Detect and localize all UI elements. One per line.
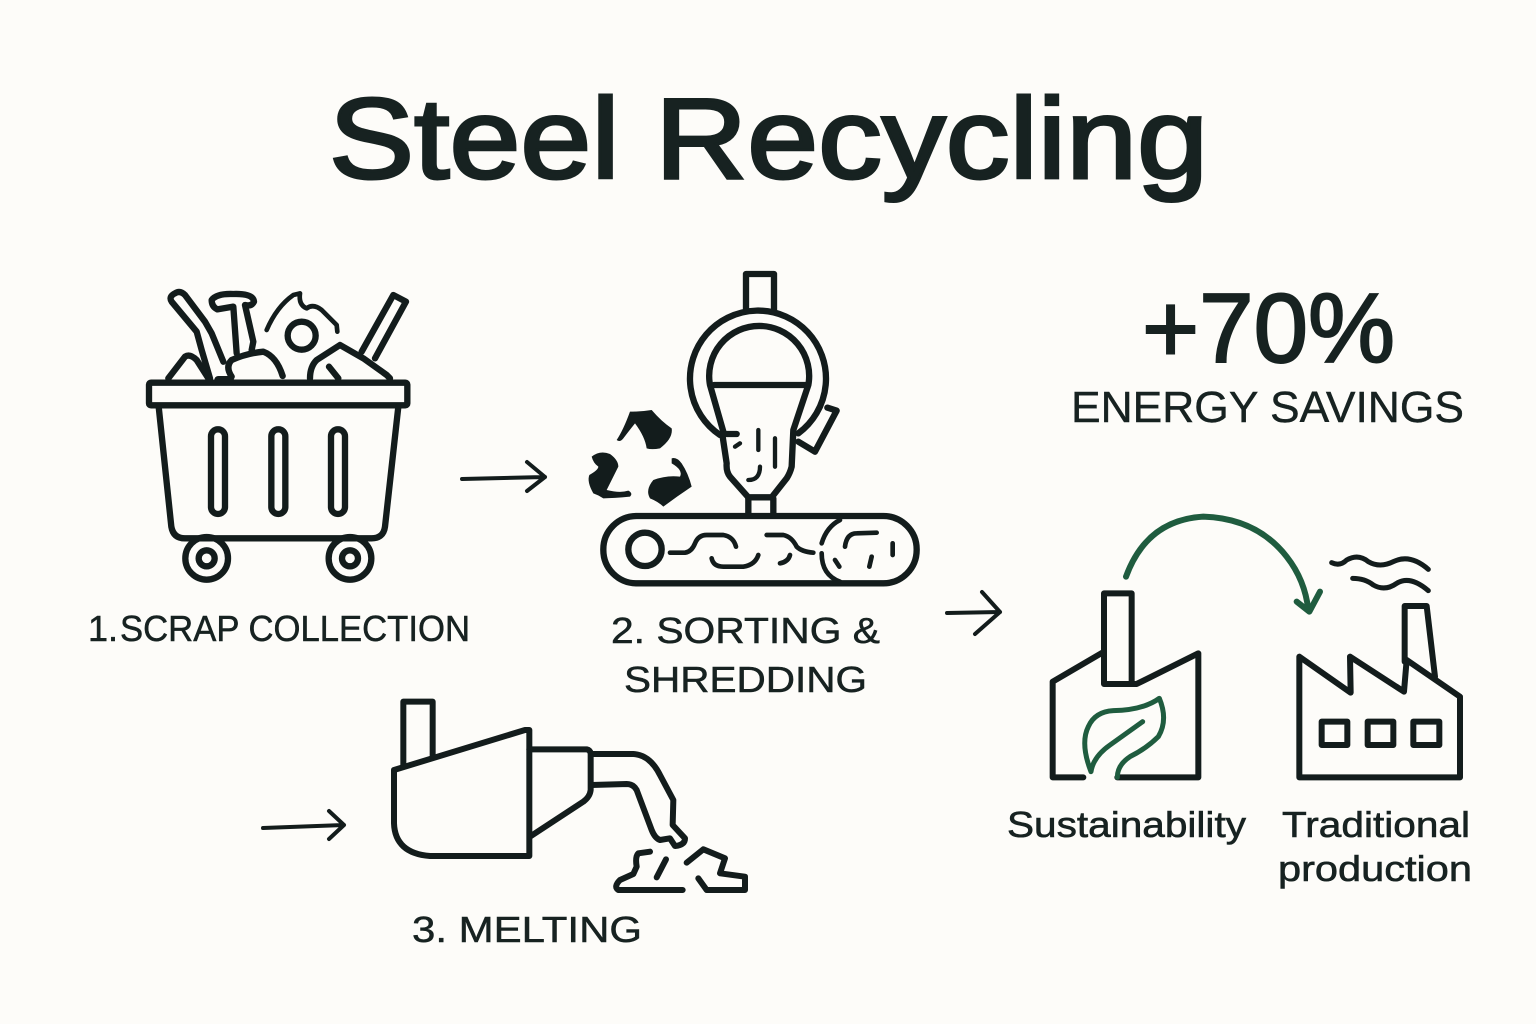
stat caption: ENERGY SAVINGS (1071, 383, 1464, 432)
label: melting: 3. MELTING (412, 909, 642, 950)
icon: sorting machine on conveyor (603, 274, 917, 583)
label: sustainability: Sustainability (1007, 804, 1246, 845)
step 1: scrap collection (88, 292, 470, 649)
icon: furnace pouring molten steel (394, 702, 745, 890)
icon: green factory with leaf (1053, 593, 1198, 777)
label: sorting and shredding: 2. SORTING & (611, 610, 880, 651)
label: traditional production: Traditional (1282, 804, 1470, 845)
step 3: melting (394, 702, 745, 950)
stat: energy savings (1071, 273, 1464, 432)
label: scrap collection: SCRAP COLLECTION (120, 608, 470, 649)
label: sorting and shredding: SHREDDING (624, 659, 867, 700)
step 2: sorting and shredding (589, 274, 917, 700)
label: scrap collection: 1. (88, 608, 118, 649)
title: Steel Recycling (329, 76, 1208, 203)
label: traditional production: production (1278, 848, 1472, 889)
arrow: step 1 to step 2 (462, 462, 545, 491)
arrow: into step 3 (263, 811, 344, 839)
icon: traditional factory with smoke (1299, 557, 1460, 777)
comparison: sustainability vs traditional (1007, 517, 1472, 889)
arrow: step 2 to savings (947, 592, 1000, 634)
icon: scrap cart (149, 292, 407, 580)
stat value: +70% (1142, 273, 1395, 383)
icon: recycling arrows (589, 410, 692, 507)
arrow: curved green (1126, 517, 1320, 612)
